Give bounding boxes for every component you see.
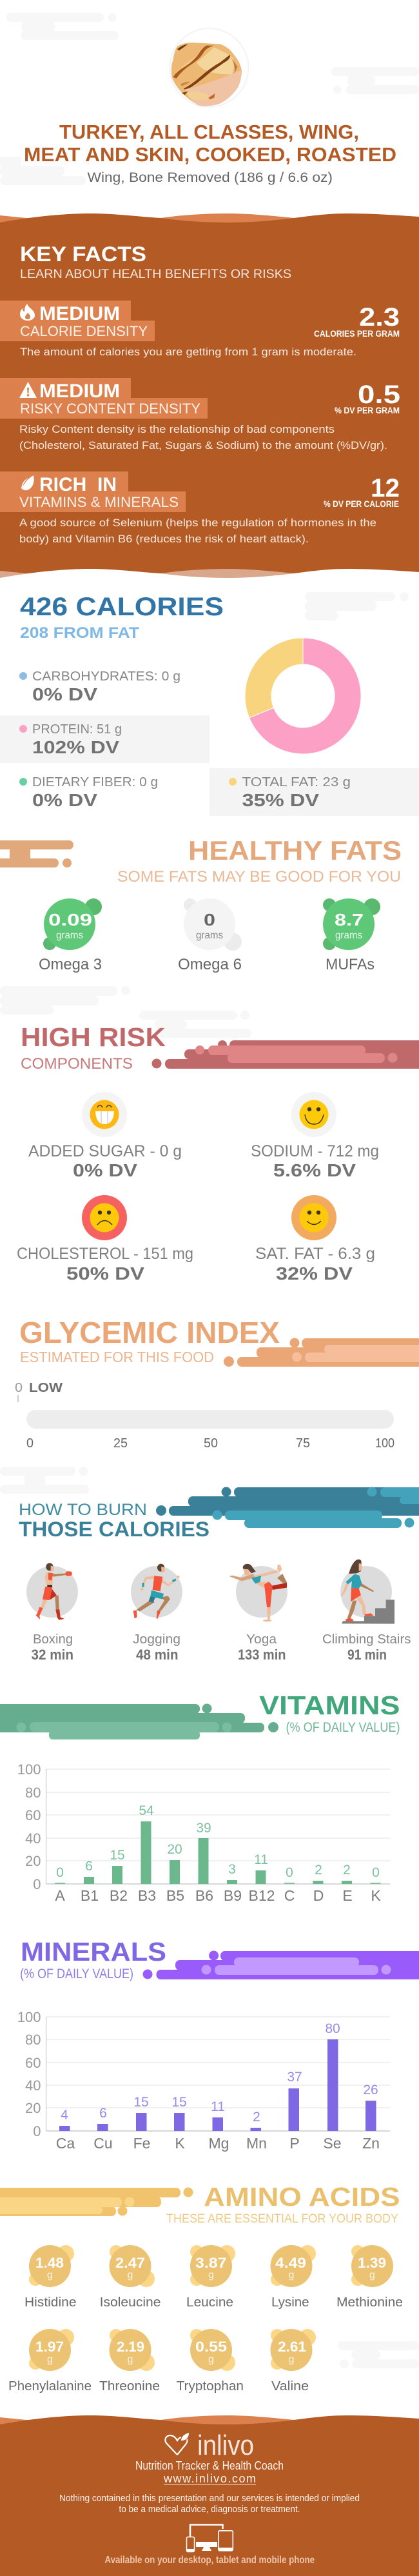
stat: calories per gram: CALORIES PER GRAM [314,329,400,339]
amino acid: phenylalanine: g [47,2354,53,2365]
stat: omega 3: Omega 3 [39,956,102,973]
icon: stair climber [341,1560,395,1624]
bar chart: minerals: P [289,2135,300,2152]
key facts heading: KEY FACTS [20,243,146,266]
amino acid: valine [271,2329,316,2393]
legend: carbohydrates: CARBOHYDRATES: 0 g [32,669,180,684]
stat: climbing stairs: Climbing Stairs [322,1632,411,1647]
legend: total fat: TOTAL FAT: 23 g [242,775,351,789]
bar chart: minerals: 20 [25,2100,41,2116]
legend: total fat [210,768,419,816]
bar chart: vitamins: C [284,1887,295,1904]
amino acid: valine: Valine [271,2379,309,2393]
glycemic value marker: 0 [15,1381,23,1395]
bar chart: vitamins: 80 [25,1785,41,1801]
legend: protein: 102% DV [32,737,119,757]
amino acid: histidine: 1.48 [35,2255,64,2271]
stat: percent DV per gram: 0.5 [358,381,400,409]
amino acid: leucine: 3.87 [195,2255,227,2271]
bar chart: vitamins: 0 [33,1876,41,1892]
stat: cholesterol: CHOLESTEROL - 151 mg [17,1245,193,1263]
legend: carbohydrates: 0% DV [32,684,97,704]
bar chart: vitamins: 6 [85,1859,93,1874]
stat: climbing stairs: 91 min [347,1647,387,1663]
decoration: vitamins bars [0,1704,278,1739]
bar chart: vitamins: 2 [315,1863,322,1878]
stat: added sugar: 0% DV [73,1160,137,1180]
bar chart: minerals: 40 [25,2077,41,2094]
amino acid: threonine: 2.19 [117,2339,144,2355]
bar chart: vitamins: B5 [166,1887,184,1904]
bar chart: vitamins: 0 [56,1865,64,1880]
bar chart: minerals: Se [323,2135,342,2152]
glycemic scale labels: 0 [26,1436,34,1451]
bar chart: vitamins: B6 [195,1887,213,1904]
text: risky content description [19,424,387,451]
heading: high risk: HIGH RISK [21,1022,166,1052]
badge: calorie density: CALORIE DENSITY [20,323,148,339]
stat: percent DV per gram [335,381,400,415]
legend: protein [0,715,210,763]
decoration: minerals bars [143,1950,419,1979]
bar chart: vitamins: 2 [343,1863,351,1878]
title: MEAT AND SKIN, COOKED, ROASTED [24,143,396,166]
amino acid: lysine: Lysine [271,2295,309,2310]
stat: percent DV per calorie [324,474,400,509]
amino acid: phenylalanine: Phenylalanine [8,2379,92,2393]
badge: calorie density: MEDIUM [39,303,120,324]
text: risky content description: Risky Content density is the relationship of bad components [19,424,335,435]
icon: jogger [133,1564,180,1620]
bar chart: minerals: 4 [61,2108,68,2123]
activity: yoga [229,1564,287,1621]
bar chart: minerals: 60 [25,2055,41,2071]
bar chart: vitamins: 60 [25,1807,41,1823]
icon: warning triangle [19,382,37,398]
bar chart: minerals: Fe [133,2135,150,2152]
stat: MUFAs [323,898,380,973]
badge: rich in vitamins and minerals: VITAMINS & MINERALS [19,494,179,510]
subheading: components: COMPONENTS [21,1055,133,1073]
bar chart: vitamins: 20 [167,1842,182,1857]
amino acid: leucine [186,2245,235,2310]
subheading: healthy fats: SOME FATS MAY BE GOOD FOR YOU [117,868,401,886]
legend: total fat: 35% DV [242,790,319,810]
title: TURKEY, ALL CLASSES, WING, [59,121,359,143]
bar chart: minerals: Zn [362,2135,380,2152]
amino acid: methionine: g [369,2270,375,2281]
bar chart: vitamins: E [342,1887,353,1904]
bar chart: vitamins: 11 [254,1852,268,1867]
amino acid: lysine [271,2245,316,2310]
amino acid: phenylalanine: 1.97 [35,2339,64,2355]
stat: yoga [238,1632,286,1663]
text: calorie density description: The amount of calories you are getting from 1 gram is moderate. [20,346,356,358]
stat: sodium: SODIUM - 712 mg [251,1142,379,1160]
amino acid: leucine: Leucine [186,2295,233,2310]
bar chart: vitamins [17,1761,390,1904]
bar chart: minerals: 26 [363,2083,378,2097]
bar chart: vitamins: B12 [249,1887,275,1904]
amino acid: tryptophan: 0.55 [195,2339,227,2355]
glycemic scale bar [26,1410,394,1429]
stat: boxing: 32 min [31,1647,73,1663]
bar chart: vitamins: A [55,1887,65,1904]
stat: omega 3 [39,898,102,973]
heading: minerals: MINERALS [21,1937,166,1967]
heading: calories: 426 CALORIES [20,593,224,621]
bar chart: minerals: 6 [99,2106,107,2121]
icon: cholesterol emoji [82,1195,127,1240]
disclaimer: to be a medical advice, diagnosis or treatment. [119,2504,300,2515]
bar chart: vitamins: 39 [196,1821,211,1836]
stat: MUFAs: 8.7 [335,910,364,929]
bar chart: vitamins: 3 [228,1862,236,1877]
heading: vitamins: VITAMINS [259,1690,400,1720]
badge: risky content density [0,378,208,419]
amino acid: methionine [336,2245,403,2310]
glycemic scale labels: 50 [204,1436,218,1451]
bar chart: minerals: K [175,2135,185,2152]
badge: rich in vitamins and minerals [0,471,186,512]
stat: percent DV per calorie: 12 [371,474,400,502]
website link: www.inlivo.com [163,2472,256,2485]
icon: leaf [21,475,34,490]
amino acid: isoleucine: 2.47 [115,2255,145,2271]
glycemic value marker [15,1381,63,1402]
disclaimer: Nothing contained in this presentation and our services is intended or implied [59,2493,360,2504]
activity: climbing stairs [340,1560,395,1624]
heading: healthy fats: HEALTHY FATS [188,835,402,866]
stat: calories per gram: 2.3 [359,303,400,332]
activity: jogging [131,1564,182,1620]
stat: added sugar: ADDED SUGAR - 0 g [28,1142,182,1160]
bar chart: vitamins: 54 [139,1803,154,1818]
heading: amino acids: AMINO ACIDS [204,2182,400,2212]
stat: omega 3: 0.09 [48,910,92,929]
icon: sodium emoji [291,1092,336,1137]
stat: jogging [133,1632,180,1663]
subheading: amino acids: THESE ARE ESSENTIAL FOR YOUR BODY [166,2212,398,2226]
badge: risky content density: RISKY CONTENT DENSITY [20,401,200,417]
amino acid: valine: 2.61 [278,2339,306,2355]
stat: yoga: 133 min [238,1647,286,1663]
amino acid: tryptophan: g [208,2354,214,2365]
stat: omega 6: Omega 6 [178,956,242,973]
amino acid: leucine: g [208,2270,214,2281]
stat: saturated fat: SAT. FAT - 6.3 g [255,1245,375,1263]
stat: percent DV per calorie: % DV PER CALORIE [324,499,399,509]
glycemic scale labels: 100 [375,1436,395,1451]
bar chart: vitamins: 20 [25,1853,41,1869]
amino acid: methionine: 1.39 [358,2255,386,2271]
glycemic value marker: LOW [29,1381,63,1395]
bar chart: vitamins: 100 [17,1761,41,1778]
food photo: grilled turkey wing [170,28,248,107]
amino acid: histidine: Histidine [24,2295,76,2310]
badge: risky content density: MEDIUM [39,381,120,402]
icon: flame [20,304,35,321]
amino acid: threonine: Threonine [99,2379,160,2393]
text: risky content description: (Cholesterol, Saturated Fat, Sugars & Sodium) to the amount (%DV/gr). [19,440,387,451]
badge: rich in vitamins and minerals: RICH IN [39,474,117,495]
bar chart: minerals: 80 [325,2021,340,2036]
stat: omega 3: grams [56,930,83,941]
icon: added sugar emoji [82,1092,127,1137]
stat: sodium [251,1142,379,1180]
stat: omega 6 [178,898,242,973]
panel: footer [0,2415,419,2576]
decoration: burn calories bars [156,1487,419,1528]
bar chart: minerals: 80 [25,2032,41,2048]
bar chart: vitamins: K [371,1887,381,1904]
stat: cholesterol: 50% DV [66,1263,144,1283]
icon: saturated fat emoji [291,1195,336,1240]
stat: cholesterol [17,1245,193,1283]
stat: jogging: Jogging [133,1632,180,1647]
amino acid: threonine: g [128,2354,133,2365]
stat: saturated fat: 32% DV [276,1263,353,1283]
amino acid: valine: g [289,2354,294,2365]
stat: saturated fat [255,1245,375,1283]
amino acid: histidine [24,2245,76,2310]
stat: calories per gram [314,303,400,339]
bar chart: minerals: 100 [17,2009,41,2025]
legend: dietary fiber: 0% DV [32,790,97,810]
subheading: calories from fat: 208 FROM FAT [20,624,139,642]
decoration: glycemic bars [224,1338,419,1367]
stat: sodium: 5.6% DV [273,1160,356,1180]
bar chart: minerals: 11 [211,2099,225,2114]
title [24,121,396,166]
bar chart: minerals: Ca [56,2135,75,2152]
disclaimer [59,2493,360,2515]
amino acid: isoleucine [100,2245,161,2310]
stat: climbing stairs [322,1632,411,1663]
stat: MUFAs: grams [335,930,362,941]
bar chart: vitamins: 0 [286,1865,293,1880]
heading: those calories: THOSE CALORIES [19,1518,210,1541]
stat: boxing [31,1632,73,1663]
bar chart: minerals: 15 [133,2095,149,2110]
text: vitamins description [19,517,376,545]
text: vitamins description: body) and Vitamin B6 (reduces the risk of heart attack). [19,533,309,545]
bar chart: minerals [17,2009,390,2152]
bar chart: minerals: Mn [246,2135,267,2152]
serving size subtitle: Wing, Bone Removed (186 g / 6.6 oz) [88,170,333,185]
amino acid: phenylalanine [8,2329,92,2393]
tagline: Nutrition Tracker & Health Coach [135,2459,284,2472]
amino acid: isoleucine: Isoleucine [100,2295,161,2310]
decoration: healthy fats bars [0,840,73,867]
text: vitamins description: A good source of Selenium (helps the regulation of hormones in the [19,517,376,529]
availability note: Available on your desktop, tablet and mobile phone [104,2555,315,2566]
icon: boxer [35,1563,72,1620]
badge: calorie density [0,301,155,341]
subheading: minerals: (% OF DAILY VALUE) [20,1967,133,1981]
stat: jogging: 48 min [136,1647,178,1663]
panel: key facts [0,213,419,584]
bar chart: vitamins: B3 [138,1887,156,1904]
bar chart: minerals: Cu [93,2135,113,2152]
amino acid: lysine: 4.49 [275,2255,306,2271]
stat: MUFAs: MUFAs [326,956,375,973]
heading: glycemic index: GLYCEMIC INDEX [19,1316,280,1349]
amino acid: tryptophan: Tryptophan [177,2379,244,2393]
legend: dietary fiber: DIETARY FIBER: 0 g [32,775,158,789]
heading: how to burn: HOW TO BURN [19,1501,147,1519]
amino acid: lysine: g [289,2270,294,2281]
bar chart: vitamins: 0 [372,1865,380,1880]
logo: inlivo [165,2430,254,2461]
stat: percent DV per gram: % DV PER GRAM [335,406,400,415]
stat: omega 6: 0 [204,910,215,929]
bar chart: minerals: 2 [253,2110,260,2125]
bar chart: vitamins: B1 [81,1887,99,1904]
stat: boxing: Boxing [33,1632,73,1647]
subheading: glycemic index: ESTIMATED FOR THIS FOOD [20,1349,214,1365]
subheading: vitamins: (% OF DAILY VALUE) [286,1720,400,1735]
glycemic scale labels: 25 [113,1436,128,1451]
legend: dietary fiber [19,775,158,810]
glycemic scale labels: 75 [296,1436,310,1451]
key facts subheading: LEARN ABOUT HEALTH BENEFITS OR RISKS [20,268,291,281]
stat: added sugar [28,1142,182,1180]
legend: protein: PROTEIN: 51 g [32,722,122,737]
bar chart: minerals: 37 [287,2070,302,2085]
icon: yoga pose [229,1564,287,1621]
amino acid: tryptophan [177,2329,244,2393]
stat: omega 6: grams [196,930,223,941]
amino acid: isoleucine: g [128,2270,133,2281]
donut chart: macronutrients [245,638,361,754]
bar chart: vitamins: 40 [25,1830,41,1847]
activity: boxing [26,1563,78,1620]
glycemic scale labels [26,1436,395,1451]
bar chart: minerals: 15 [171,2095,187,2110]
decoration: high risk bars [152,1040,419,1069]
bar chart: vitamins: D [313,1887,324,1904]
icon: devices [187,2524,233,2551]
amino acid: threonine [99,2329,160,2393]
bar chart: minerals: Mg [209,2135,229,2152]
bar chart: vitamins: 15 [110,1848,125,1863]
amino acid: histidine: g [47,2270,53,2281]
logo: inlivo: inlivo [197,2430,254,2461]
legend: carbohydrates [19,669,180,704]
decoration: amino acids bars [0,2188,193,2216]
stat: yoga: Yoga [246,1632,277,1647]
bar chart: vitamins: B2 [110,1887,128,1904]
bar chart: minerals: 0 [33,2123,41,2139]
amino acid: methionine: Methionine [336,2295,403,2310]
bar chart: vitamins: B9 [224,1887,242,1904]
